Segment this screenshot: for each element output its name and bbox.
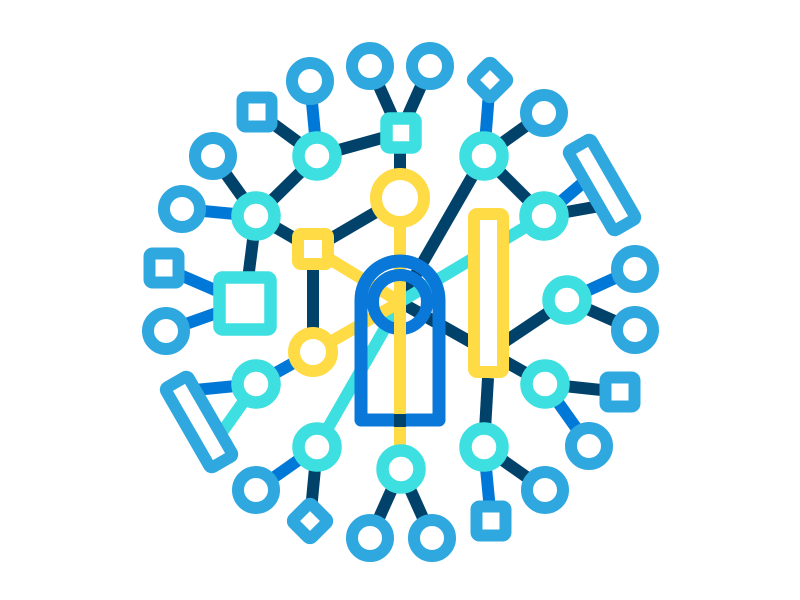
yellow nodes [294,174,503,372]
outer ring nodes [148,48,653,556]
cyan inner nodes [220,118,586,488]
blue lines [164,80,635,521]
central figure: arch with head [361,261,439,420]
navy lines [213,66,635,538]
yellow lines [313,198,400,469]
center overlay lines [394,302,406,440]
connector lines [164,66,635,538]
cyan lines [220,216,544,447]
